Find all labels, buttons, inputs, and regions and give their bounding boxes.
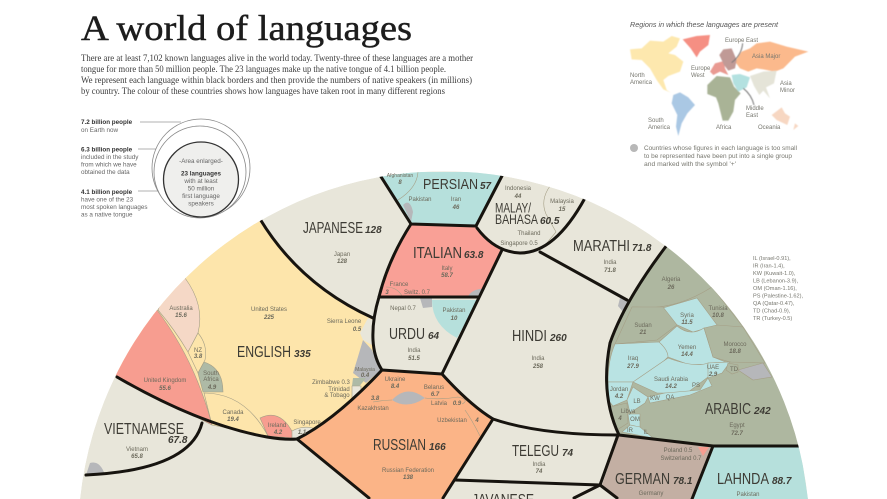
label: Italian: Italy — [441, 266, 453, 272]
label: Italian: 3 — [385, 290, 389, 296]
label: Hindi: 258 — [532, 364, 544, 370]
region: German — [602, 435, 713, 499]
label: German: GERMAN — [615, 471, 670, 488]
label: Japanese: JAPANESE — [303, 220, 363, 237]
label: Russian: Russian Federation — [382, 468, 434, 474]
map labels: South — [648, 118, 664, 124]
label: Russian: 6.7 — [431, 392, 440, 398]
label: Persian: 8 — [398, 180, 402, 186]
label: Arabic: Saudi Arabia — [654, 377, 689, 383]
label: Urdu: URDU — [389, 326, 425, 343]
regional world map — [630, 20, 808, 168]
label: Marathi: India — [603, 260, 617, 266]
label: English: Africa — [203, 377, 219, 383]
label: English: 55.6 — [159, 386, 171, 392]
label: German: Poland 0.5 — [664, 448, 693, 454]
label: Russian: RUSSIAN — [373, 437, 426, 454]
abbreviations list: KW (Kuwait-1.0), — [753, 271, 796, 277]
German inset: Switzerland — [698, 447, 709, 456]
label: Russian: 8.4 — [391, 384, 400, 390]
map labels: America — [648, 125, 671, 131]
semicircle language chart — [80, 171, 808, 499]
region: Lahnda — [692, 446, 808, 499]
abbreviations list: OM (Oman-1.16), — [753, 286, 797, 292]
intro text: We represent each language within black borders and then provide the numbers of native speakers (in millions) — [81, 75, 472, 86]
nested circles: 50 million — [188, 186, 215, 192]
label: Persian: Afghanistan — [387, 173, 413, 179]
label: Malay: BAHASA — [495, 212, 539, 227]
label: English: 0.5 — [353, 327, 362, 333]
label: English: 225 — [263, 315, 275, 321]
label: English: Sierra Leone — [327, 319, 362, 325]
label: Hindi: 260 — [549, 333, 567, 344]
label: Lahnda: LAHNDA — [717, 471, 770, 488]
label: English: United States — [251, 307, 287, 313]
label: Lahnda: Pakistan — [736, 492, 760, 498]
key labels: 6.3 billion people — [81, 146, 133, 154]
map labels: West — [691, 73, 705, 79]
label: English — [144, 306, 375, 436]
label: English: 4.9 — [207, 385, 217, 391]
label: Russian: Belarus — [424, 385, 444, 391]
map labels: East — [746, 113, 758, 119]
map shapes — [630, 35, 808, 136]
region: Persian — [378, 172, 504, 226]
label: Russian: 4 — [474, 418, 479, 424]
region: Italian — [379, 224, 502, 298]
map labels: Asia Major — [752, 54, 780, 60]
label: Urdu: 64 — [428, 331, 440, 342]
abbreviations list: PS (Palestine-1.62), — [753, 294, 804, 300]
label: English: United Kingdom — [144, 378, 186, 384]
label: Italian: France — [390, 282, 409, 288]
label: German: 78.1 — [673, 476, 693, 487]
abbreviations list: TR (Turkey-0.5) — [753, 316, 792, 322]
label: Telegu: 74 — [562, 448, 574, 459]
region: Arabic — [608, 246, 798, 446]
label: Italian: Switz. 0.7 — [404, 290, 431, 296]
label: Russian: 3.8 — [371, 396, 380, 402]
thick language borders — [86, 172, 800, 499]
label: Persian — [387, 173, 492, 211]
label: English: 19.4 — [227, 417, 239, 423]
label: Arabic: 4.2 — [614, 394, 624, 400]
label: Persian: 46 — [452, 205, 460, 211]
region: English — [100, 219, 382, 439]
label: Russian: Latvia — [431, 401, 448, 407]
label: Arabic: Yemen — [678, 345, 696, 351]
label: English: Australia — [169, 306, 193, 312]
key labels: most spoken languages — [81, 204, 148, 211]
label: Japanese — [303, 220, 382, 265]
label: Arabic: Algeria — [662, 277, 681, 283]
label: Arabic: 4 — [617, 416, 622, 422]
label: English: Zimbabwe 0.3 — [312, 380, 351, 386]
label: Hindi — [512, 328, 567, 370]
label: Russian: Uzbekistan — [437, 418, 467, 424]
map labels: Africa — [716, 125, 732, 131]
label: Arabic: IR — [627, 428, 634, 434]
label: Arabic: 21 — [639, 330, 647, 336]
nested circles — [152, 119, 250, 218]
label: Hindi: India — [531, 356, 545, 362]
label: Hindi: HINDI — [512, 328, 547, 345]
label: Arabic: PS — [692, 383, 700, 389]
label: Arabic: 11.5 — [681, 320, 693, 326]
label: Marathi: MARATHI — [573, 238, 630, 255]
label: Arabic: Tunisia — [708, 306, 728, 312]
label: English: NZ — [194, 348, 202, 354]
label: Lahnda — [717, 471, 792, 498]
key labels — [81, 119, 181, 218]
label: Italian: 58.7 — [441, 273, 453, 279]
map labels — [630, 38, 795, 131]
label: English: 1.1 — [298, 430, 307, 436]
label: Arabic: Syria — [680, 313, 694, 319]
label: German — [615, 448, 702, 497]
label: Arabic: Morocco — [723, 342, 747, 348]
label: English: Canada — [222, 410, 244, 416]
label: Arabic: 242 — [753, 406, 771, 417]
label: Vietnamese: 67.8 — [168, 435, 188, 446]
label: Urdu — [389, 306, 466, 362]
abbreviations list: TD (Chad-0.9), — [753, 308, 791, 314]
map labels: North — [630, 73, 645, 79]
label: Malay: MALAY/ — [495, 200, 531, 216]
label: Malay: 15 — [559, 207, 566, 213]
intro text: by country. The colour of these countries shows how languages have taken root in many different regions — [81, 86, 445, 97]
label: Vietnamese: Vietnam — [126, 447, 148, 453]
map heading: Regions in which these languages are present — [630, 20, 779, 29]
label: Arabic: 14.4 — [681, 352, 693, 358]
label: Arabic: 18.8 — [729, 349, 741, 355]
label: Arabic: LB — [633, 399, 641, 405]
key labels: have one of the 23 — [81, 196, 134, 204]
label: Russian — [357, 377, 479, 481]
label: Japanese: 128 — [337, 259, 348, 265]
label: Italian: 63.8 — [464, 250, 484, 261]
label: Italian: ITALIAN — [413, 245, 462, 262]
label: Urdu: 51.5 — [408, 356, 420, 362]
label: English: Singapore — [293, 420, 321, 426]
map labels: Minor — [780, 88, 795, 94]
label: Italian — [385, 245, 484, 296]
map labels: Asia — [780, 81, 792, 87]
label: English: South — [203, 371, 219, 377]
key labels: from which we have — [81, 162, 137, 168]
label: Persian: Iran — [451, 197, 461, 203]
label: English: Ireland — [268, 423, 286, 429]
label: English: & Tobago — [324, 393, 350, 399]
label: Vietnamese — [104, 421, 188, 460]
label: English: 335 — [294, 349, 311, 360]
label: Malay: Singapore 0.5 — [500, 241, 538, 247]
intro text — [81, 53, 474, 97]
map labels: Oceania — [758, 125, 781, 131]
key labels: as a native tongue — [81, 212, 133, 218]
abbreviations list: LB (Lebanon-3.9), — [753, 278, 799, 284]
label: Urdu: Pakistan — [442, 308, 466, 314]
label: Malay: Malaysia — [550, 199, 574, 205]
label: Vietnamese: 65.8 — [131, 454, 143, 460]
population circles key — [81, 119, 250, 218]
label: Arabic: Libya — [621, 409, 636, 415]
label: Malay: 44 — [514, 194, 522, 200]
key labels: 4.1 billion people — [81, 189, 133, 196]
language names and country labels — [104, 173, 792, 499]
label: Telegu — [512, 443, 574, 475]
label: English: ENGLISH — [237, 344, 291, 361]
label: Persian: 57 — [480, 181, 492, 192]
key labels: obtained the data — [81, 169, 130, 176]
label: Arabic: Egypt — [729, 423, 745, 429]
label: German: Germany — [639, 491, 663, 497]
intro text: There are at least 7,102 known languages alive in the world today. Twenty-three of these languages are a mother — [81, 53, 474, 64]
label: Arabic: Iraq — [628, 356, 638, 362]
label: English: 4.2 — [273, 430, 283, 436]
abbreviations list: IR (Iran-1.4), — [753, 264, 785, 270]
label: Malay: Thailand — [517, 231, 541, 237]
gray marks — [86, 298, 628, 475]
label: Russian: 138 — [403, 475, 414, 481]
label: Persian: Pakistan — [408, 197, 432, 203]
label: Arabic: ARABIC — [705, 401, 751, 418]
map legend: to be represented have been put into a single group — [644, 154, 793, 160]
region: Russian — [297, 370, 493, 499]
label: Telegu: India — [532, 462, 546, 468]
label: Arabic: 27.9 — [626, 364, 639, 370]
label: Malay: Indonesia — [505, 186, 532, 192]
map labels: Middle — [746, 106, 764, 112]
nested circles: first language — [182, 193, 220, 200]
key labels: 7.2 billion people — [81, 119, 133, 126]
label: Persian: PERSIAN — [423, 177, 478, 193]
label: Vietnamese: VIETNAMESE — [104, 421, 184, 438]
label: Arabic: OM — [630, 417, 640, 423]
label: Arabic: 72.7 — [731, 431, 743, 437]
map labels: Europe — [691, 66, 711, 72]
nested circles: with at least — [183, 178, 218, 185]
label: Urdu: Nepal 0.7 — [390, 306, 417, 312]
label: Arabic: Sudan — [634, 323, 652, 329]
label: German: Switzerland 0.7 — [660, 456, 702, 462]
label: Malay: 60.5 — [540, 216, 560, 227]
label: Arabic: 2.9 — [708, 372, 718, 378]
label: Marathi: 71.8 — [604, 268, 616, 274]
abbreviations list: QA (Qatar-0.47), — [753, 301, 795, 307]
label: Japanese: Japan — [334, 252, 350, 258]
abbreviations list: IL (Israel-0.91), — [753, 256, 791, 262]
label: Arabic: QA — [666, 395, 674, 401]
intro text: tongue for more than 50 million people. The 23 languages make up the native tongue of 4.1 billion people. — [81, 64, 446, 75]
label: Arabic — [610, 277, 771, 437]
label: Marathi — [573, 238, 652, 274]
map labels: America — [630, 80, 653, 86]
label: Urdu: 10 — [451, 316, 458, 322]
region: Malay — [544, 186, 556, 244]
map legend: and marked with the symbol '+' — [644, 162, 736, 168]
label: English: Trinidad — [328, 387, 350, 393]
label: Russian: Kazakhstan — [357, 406, 389, 412]
label: Japanese: 128 — [365, 225, 382, 236]
label: Arabic: TD — [730, 367, 739, 373]
label: English: 0.4 — [361, 373, 370, 379]
label: English: 15.6 — [175, 313, 187, 319]
label: Russian: 0.9 — [453, 401, 462, 407]
abbreviations list — [753, 256, 804, 322]
nested circles: 23 languages — [181, 170, 221, 178]
title: A world of languages — [81, 8, 412, 48]
map legend — [630, 144, 797, 168]
label: Urdu: India — [407, 348, 421, 354]
label: Arabic: 14.2 — [665, 384, 677, 390]
label: English: Malaysia — [355, 367, 375, 373]
label: Telegu: 74 — [536, 469, 543, 475]
label: Marathi: 71.8 — [632, 243, 652, 254]
label: Arabic: 26 — [667, 285, 675, 291]
base area — [80, 171, 808, 499]
label: Telegu: TELEGU — [512, 443, 559, 460]
label: Arabic: 10.8 — [712, 313, 724, 319]
label: English: 3.8 — [194, 354, 203, 360]
label: Russian: 166 — [429, 442, 446, 453]
label: Russian: Ukraine — [385, 377, 406, 383]
key labels: included in the study — [81, 154, 139, 161]
label: Arabic: Jordan — [610, 387, 628, 393]
nested circles: speakers — [188, 200, 214, 208]
map labels: Europe East — [725, 38, 758, 44]
label: Arabic: KW — [650, 396, 660, 402]
nested circles: -Area enlarged- — [179, 158, 223, 165]
label: Lahnda: 88.7 — [772, 476, 792, 487]
label: Arabic: UAE — [707, 365, 719, 371]
label: Arabic: IL — [643, 430, 649, 436]
key labels: on Earth now — [81, 127, 119, 134]
map legend: Countries whose figures in each language is too small — [644, 146, 797, 152]
label: Malay — [495, 186, 574, 247]
region: Urdu — [420, 298, 478, 338]
